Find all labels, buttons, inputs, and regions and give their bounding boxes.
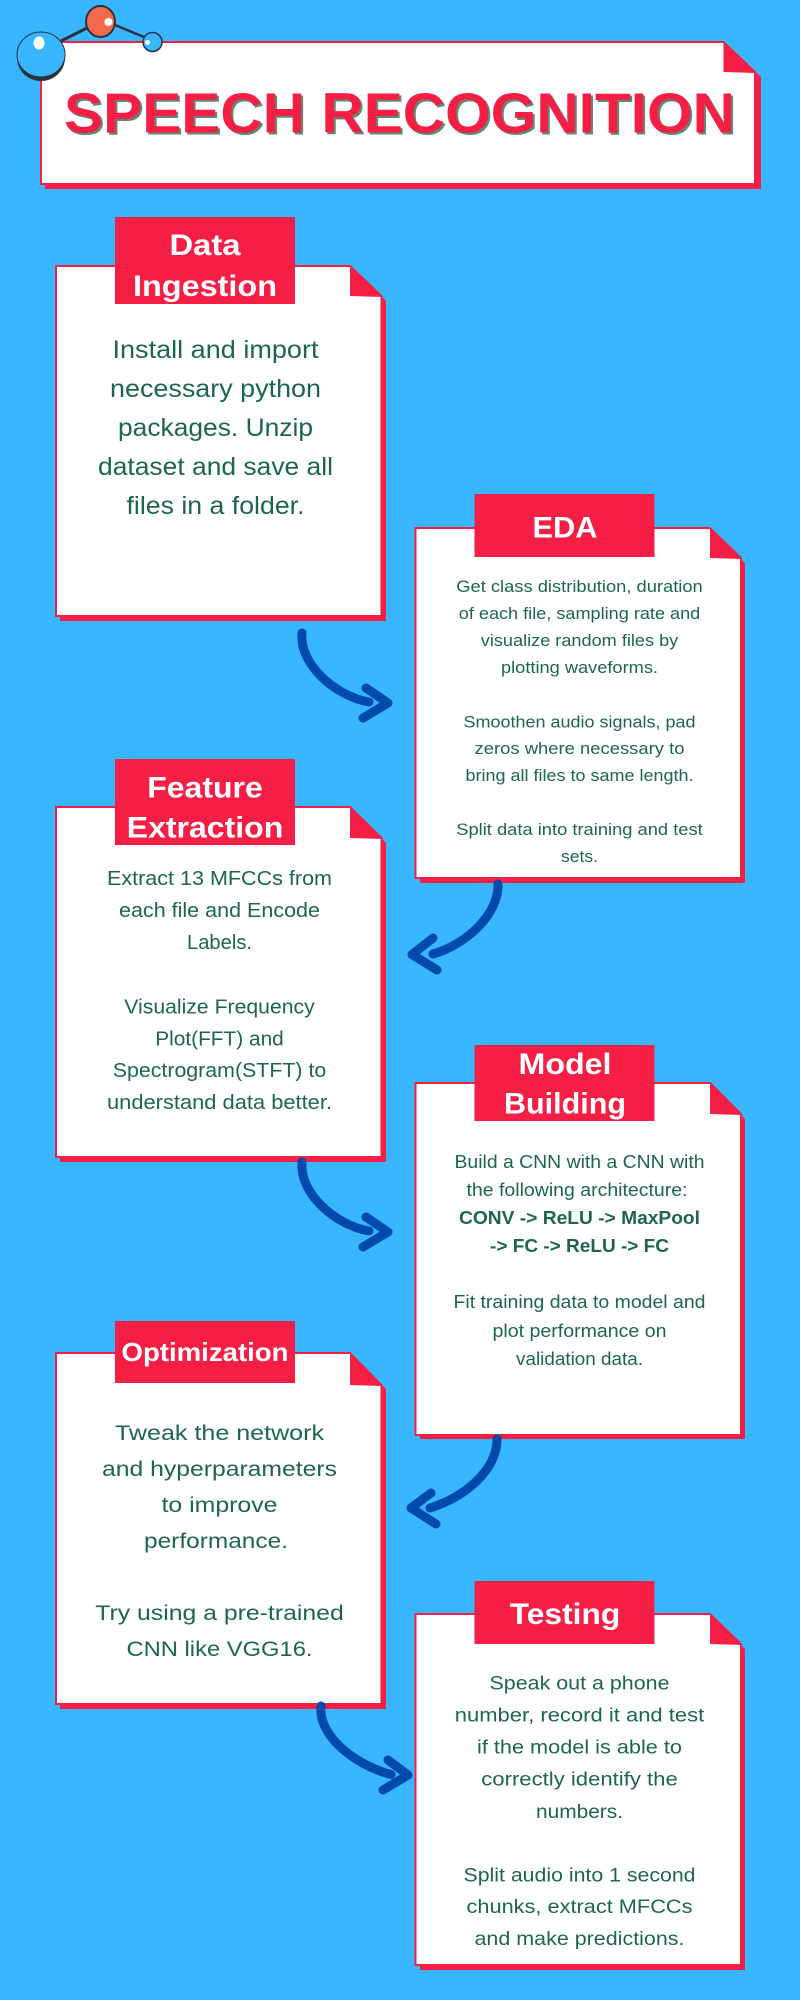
text: feature extraction: Spectrogram(STFT) to xyxy=(113,1059,326,1082)
text: feature extraction: understand data better. xyxy=(107,1091,332,1114)
heading: model building xyxy=(474,1045,654,1121)
text: optimization: Try using a pre-trained xyxy=(95,1601,344,1625)
text: testing xyxy=(455,1672,705,1950)
title: SPEECH RECOGNITION xyxy=(66,84,737,148)
heading: feature extraction: Feature xyxy=(147,772,263,804)
text: EDA: zeros where necessary to xyxy=(474,739,684,758)
panel: feature extraction xyxy=(56,759,386,1162)
text: feature extraction xyxy=(107,867,332,1114)
text: testing: correctly identify the xyxy=(481,1768,678,1790)
heading: testing: Testing xyxy=(510,1598,620,1631)
arrow: model building to optimization xyxy=(411,1439,497,1524)
heading: testing xyxy=(474,1581,654,1644)
heading: EDA: EDA xyxy=(532,512,598,544)
arrow: feature extraction to model building xyxy=(302,1162,388,1247)
text: EDA: Split data into training and test xyxy=(456,820,703,839)
arrow: optimization to testing xyxy=(321,1706,408,1790)
text: testing: Split audio into 1 second xyxy=(464,1864,696,1886)
title: SPEECH RECOGNITION xyxy=(64,82,735,146)
text: optimization: CNN like VGG16. xyxy=(126,1637,312,1661)
text: optimization: Tweak the network xyxy=(115,1421,324,1445)
text: testing: and make predictions. xyxy=(474,1928,684,1950)
text: model building: -> FC -> ReLU -> FC xyxy=(490,1236,669,1256)
text: EDA: bring all files to same length. xyxy=(466,766,694,785)
text: feature extraction: each file and Encode xyxy=(119,899,320,922)
text: EDA: plotting waveforms. xyxy=(501,658,658,677)
text: optimization: to improve xyxy=(162,1493,278,1517)
panel: testing xyxy=(416,1581,745,1970)
text: optimization xyxy=(95,1421,344,1661)
text: model building: plot performance on xyxy=(492,1321,666,1341)
text: data ingestion: packages. Unzip xyxy=(118,414,313,442)
text: testing: if the model is able to xyxy=(477,1736,682,1758)
text: model building: Build a CNN with a CNN with xyxy=(454,1152,704,1172)
text: model building xyxy=(454,1152,706,1369)
heading: data ingestion: Ingestion xyxy=(133,270,277,303)
text: feature extraction: Extract 13 MFCCs from xyxy=(107,867,332,890)
text: EDA: sets. xyxy=(561,847,598,866)
heading: optimization xyxy=(115,1321,295,1383)
heading: feature extraction: Extraction xyxy=(127,812,283,844)
text: testing: number, record it and test xyxy=(455,1704,705,1726)
text: data ingestion: files in a folder. xyxy=(126,492,304,520)
text: feature extraction: Visualize Frequency xyxy=(124,996,316,1018)
panel: data ingestion xyxy=(56,217,386,621)
panel: title banner xyxy=(41,41,761,189)
text: model building: Fit training data to model and xyxy=(454,1292,706,1312)
text: data ingestion xyxy=(98,336,333,520)
panel: model building xyxy=(416,1045,745,1439)
heading: model building: Building xyxy=(504,1088,626,1120)
text: testing: numbers. xyxy=(536,1801,623,1823)
text: data ingestion: necessary python xyxy=(110,375,321,403)
heading: data ingestion xyxy=(115,217,295,304)
text: data ingestion: Install and import xyxy=(112,336,319,364)
text: data ingestion: dataset and save all xyxy=(98,453,333,481)
text: model building: validation data. xyxy=(516,1349,643,1369)
arrow: EDA to feature extraction xyxy=(412,884,498,970)
text: EDA: Get class distribution, duration xyxy=(456,577,703,596)
text: feature extraction: Labels. xyxy=(187,931,252,954)
text: EDA: Smoothen audio signals, pad xyxy=(464,712,696,732)
text: testing: chunks, extract MFCCs xyxy=(466,1896,693,1918)
text: EDA: of each file, sampling rate and xyxy=(459,604,700,623)
icon: molecule xyxy=(17,6,162,81)
heading: data ingestion: Data xyxy=(170,229,241,262)
panel: optimization xyxy=(56,1321,386,1709)
text: model building: CONV -> ReLU -> MaxPool xyxy=(459,1208,700,1228)
panel: EDA xyxy=(416,494,745,883)
text: optimization: and hyperparameters xyxy=(102,1457,337,1481)
text: model building: the following architecture: xyxy=(466,1180,688,1200)
text: optimization: performance. xyxy=(144,1529,288,1553)
text: EDA: visualize random files by xyxy=(481,631,679,650)
arrow: ingestion to EDA xyxy=(302,633,388,718)
heading: feature extraction xyxy=(115,759,295,845)
heading: model building: Model xyxy=(518,1048,612,1081)
heading: EDA xyxy=(474,494,654,557)
heading: optimization: Optimization xyxy=(122,1337,288,1367)
text: EDA xyxy=(456,577,703,866)
text: testing: Speak out a phone xyxy=(490,1672,670,1694)
text: feature extraction: Plot(FFT) and xyxy=(155,1028,284,1050)
